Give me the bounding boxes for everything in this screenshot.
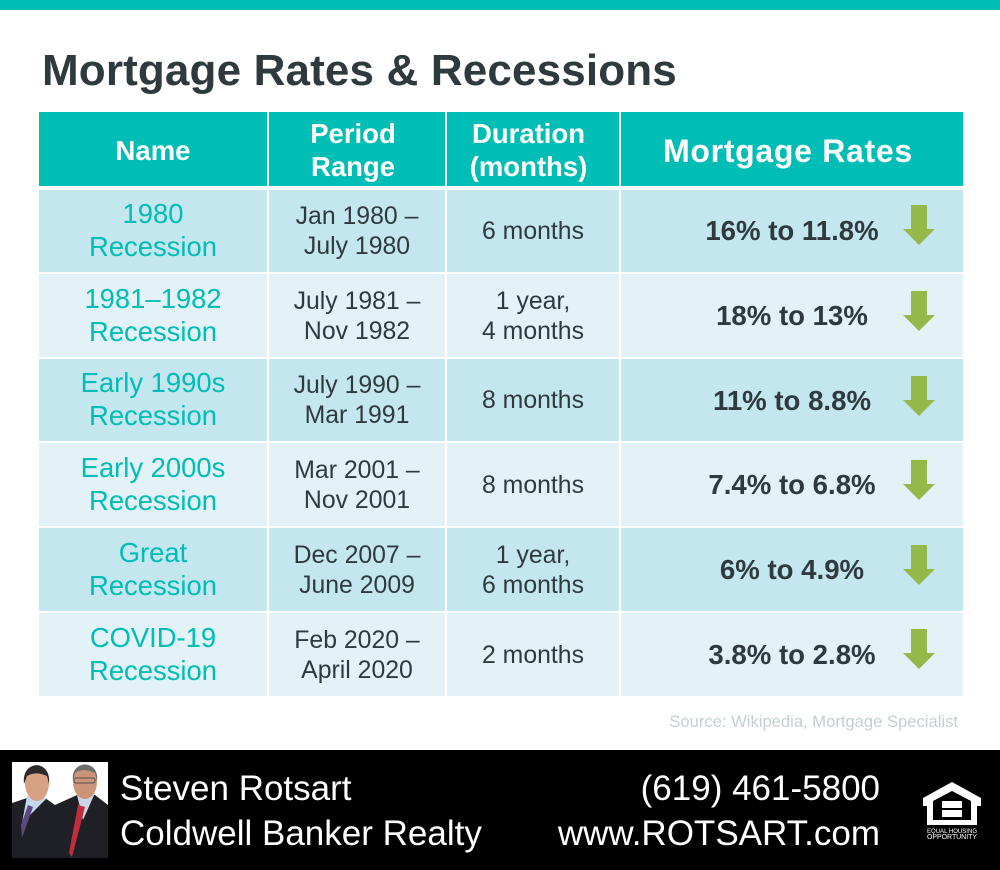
row 2 name: 1981–1982 <box>84 282 222 314</box>
row 4 name: Early 2000s <box>81 452 225 482</box>
row 5 duration: 6 months <box>482 572 584 598</box>
row 6 name <box>39 613 267 696</box>
top accent bar <box>0 0 1000 10</box>
row 4 name: Recession <box>89 484 217 516</box>
row 2 period: July 1981 – <box>294 288 420 314</box>
row 5 duration <box>447 528 619 611</box>
row 5 rate panel <box>621 528 963 611</box>
row 6 period: April 2020 <box>301 656 413 684</box>
row 2 duration <box>447 274 619 357</box>
table header: period range <box>269 112 445 186</box>
table header: mortgage rates <box>621 112 963 186</box>
row 1 duration <box>447 190 619 272</box>
row 5 name: Great <box>119 536 187 568</box>
row 6 rate: 3.8% to 2.8% <box>708 639 876 670</box>
table header: duration <box>447 112 619 186</box>
row 3 name: Recession <box>89 400 217 431</box>
table header: duration: (months) <box>470 151 587 182</box>
row 4 duration: 8 months <box>482 472 584 498</box>
row 6 name: Recession <box>89 654 217 686</box>
row 2 period <box>269 274 445 357</box>
company name: Coldwell Banker Realty <box>120 814 482 853</box>
table header: name <box>39 112 267 186</box>
row 5 name: Recession <box>89 570 217 600</box>
icon: equal housing opportunity: EQUAL HOUSING <box>927 829 977 835</box>
row 2 arrow <box>903 291 935 331</box>
row 1 period: Jan 1980 – <box>296 203 418 230</box>
table header: period range: Period <box>310 118 396 149</box>
row 1 arrow <box>903 205 935 245</box>
row 3 rate: 11% to 8.8% <box>713 385 871 416</box>
row 3 duration: 8 months <box>482 387 584 414</box>
row 1 name: Recession <box>89 231 217 262</box>
row 6 arrow <box>903 629 935 669</box>
row 1 period: July 1980 <box>304 233 410 260</box>
row 5 period <box>269 528 445 611</box>
row 1 duration: 6 months <box>482 218 584 245</box>
row 2 period: Nov 1982 <box>304 318 410 344</box>
row 3 period: Mar 1991 <box>305 402 409 429</box>
row 4 period <box>269 443 445 526</box>
row 6 duration: 2 months <box>482 642 584 668</box>
row 2 duration: 1 year, <box>496 288 570 314</box>
row 4 rate panel <box>621 443 963 526</box>
row 4 period: Nov 2001 <box>304 486 410 514</box>
website: www.ROTSART.com <box>558 814 880 853</box>
row 4 name <box>39 443 267 526</box>
row 5 period: June 2009 <box>299 572 415 598</box>
phone number: (619) 461-5800 <box>641 769 880 808</box>
row 3 arrow <box>903 376 935 416</box>
row 3 period <box>269 359 445 441</box>
row 5 arrow <box>903 545 935 585</box>
row 1 rate panel <box>621 190 963 272</box>
row 2 rate: 18% to 13% <box>716 300 868 331</box>
row 5 name <box>39 528 267 611</box>
row 2 duration: 4 months <box>482 318 584 344</box>
row 1 name <box>39 190 267 272</box>
row 4 rate: 7.4% to 6.8% <box>708 469 876 500</box>
table header: duration: Duration <box>472 118 585 149</box>
row 2 name: Recession <box>89 316 217 346</box>
row 2 rate panel <box>621 274 963 357</box>
row 6 duration <box>447 613 619 696</box>
row 4 duration <box>447 443 619 526</box>
icon: equal housing opportunity <box>923 782 981 841</box>
row 3 name <box>39 359 267 441</box>
row 4 period: Mar 2001 – <box>294 456 420 484</box>
title: Mortgage Rates & Recessions <box>42 46 677 95</box>
row 1 rate: 16% to 11.8% <box>705 215 879 246</box>
agent photo <box>12 762 108 858</box>
row 3 period: July 1990 – <box>294 372 420 399</box>
row 1 name: 1980 <box>123 198 183 229</box>
table header: mortgage rates: Mortgage Rates <box>663 132 913 168</box>
row 1 period <box>269 190 445 272</box>
row 3 duration <box>447 359 619 441</box>
footer panel <box>0 750 1000 870</box>
row 3 rate panel <box>621 359 963 441</box>
row 5 duration: 1 year, <box>496 542 570 568</box>
row 4 arrow <box>903 460 935 500</box>
row 6 period: Feb 2020 – <box>294 626 420 654</box>
table header: period range: Range <box>311 151 395 182</box>
row 3 name: Early 1990s <box>81 367 225 398</box>
row 5 period: Dec 2007 – <box>294 542 420 568</box>
row 6 name: COVID-19 <box>90 622 216 652</box>
icon: equal housing opportunity: OPPORTUNITY <box>927 834 977 841</box>
table header: name: Name <box>116 134 190 166</box>
row 6 period <box>269 613 445 696</box>
agent name: Steven Rotsart <box>120 769 352 808</box>
row 2 name <box>39 274 267 357</box>
source note: Source: Wikipedia, Mortgage Specialist <box>669 712 958 731</box>
row 5 rate: 6% to 4.9% <box>720 554 864 585</box>
row 6 rate panel <box>621 613 963 696</box>
